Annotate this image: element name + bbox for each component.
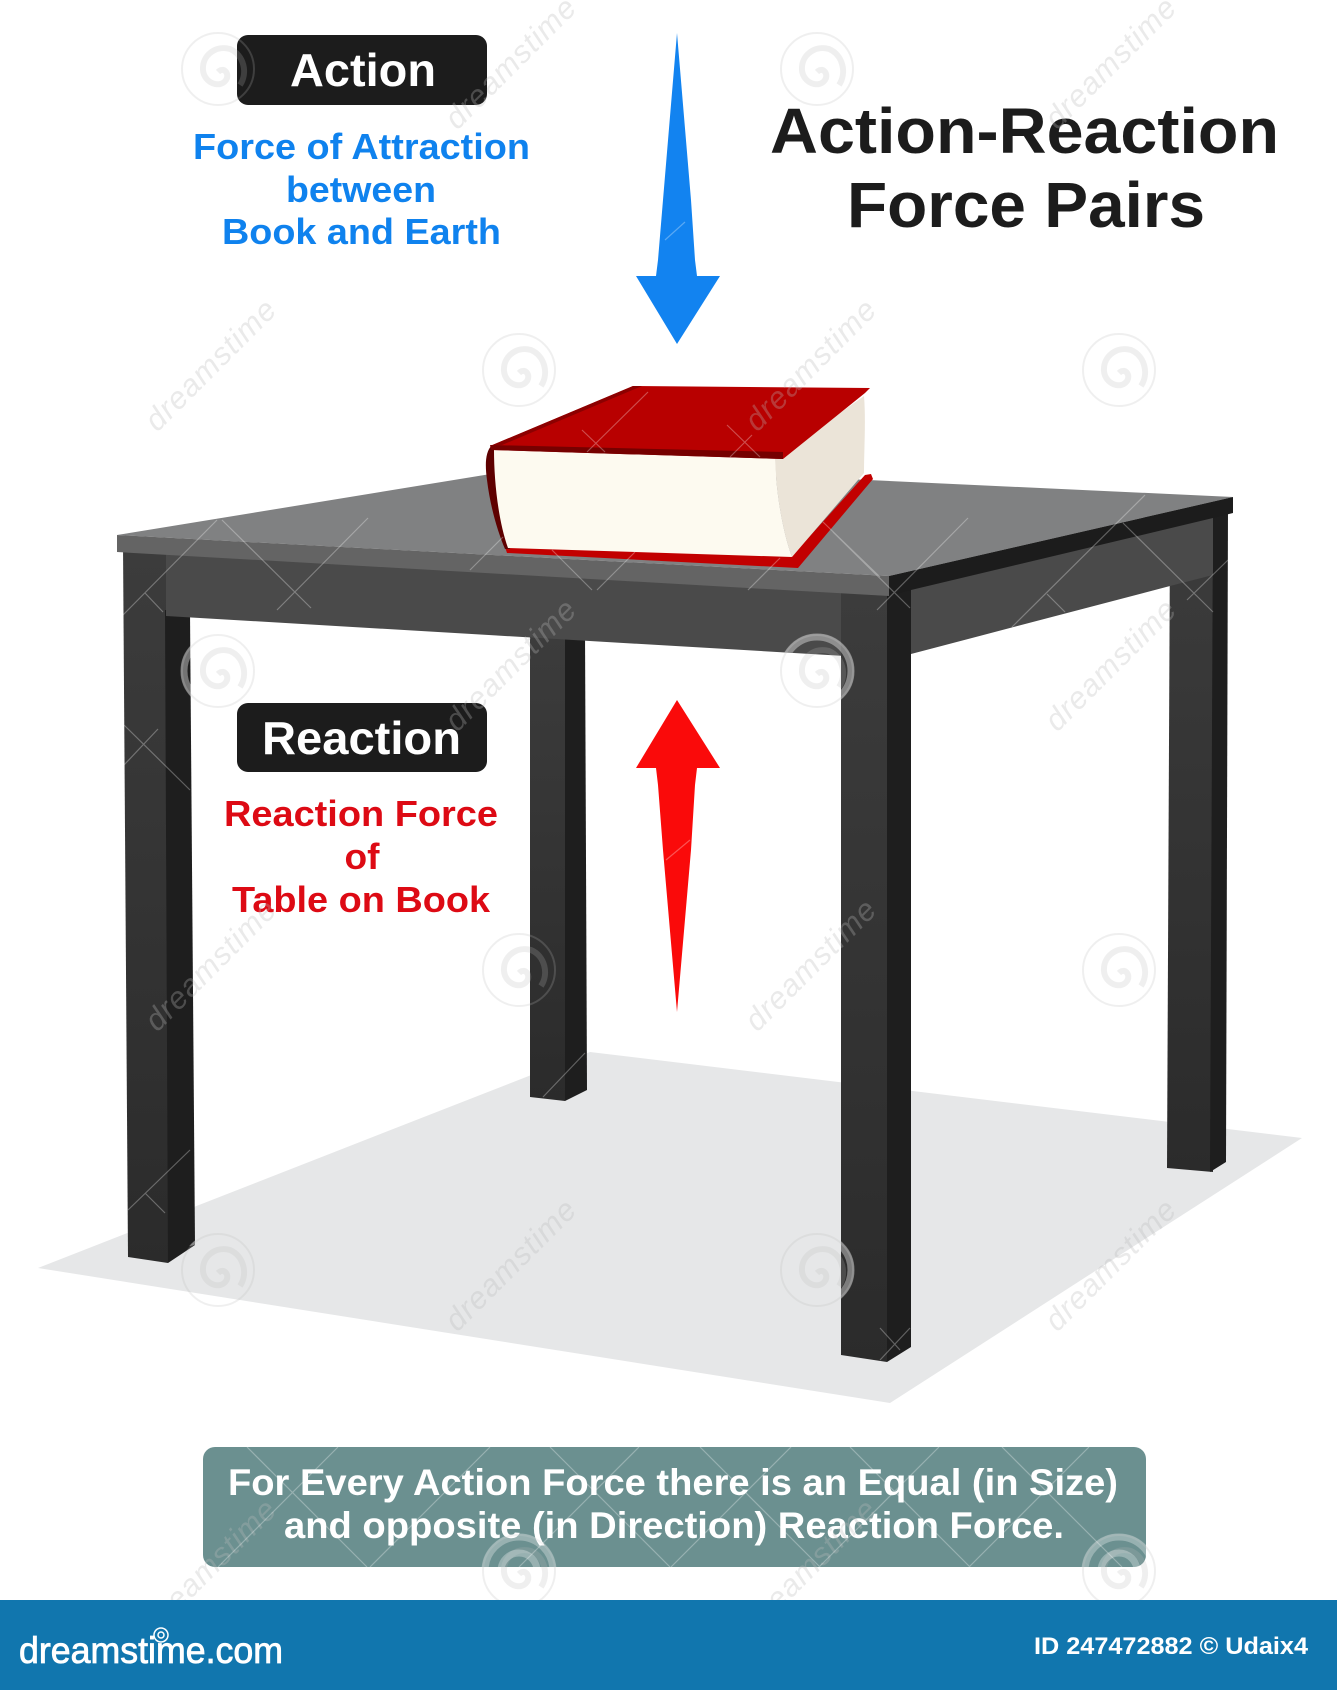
statement box: and opposite (in Direction) Reaction Force. — [284, 1505, 1064, 1546]
table top right edge — [889, 497, 1233, 596]
book top cover — [490, 386, 870, 459]
front left leg — [123, 545, 195, 1263]
watermark: dreamstime — [737, 291, 884, 438]
action description — [193, 126, 530, 252]
footer image id: ID 247472882 © Udaix4 — [1034, 1633, 1309, 1660]
watermark: dreamstime — [437, 1191, 584, 1338]
action description: between — [286, 169, 436, 210]
table top front edge — [117, 535, 889, 596]
action label — [237, 35, 487, 105]
watermark: dreamstime — [137, 891, 284, 1038]
logo spiral mark — [154, 1628, 168, 1642]
table — [117, 465, 1233, 1362]
action label: Action — [290, 44, 436, 96]
watermark: dreamstime — [137, 1491, 284, 1638]
title — [770, 95, 1279, 241]
reaction label: Reaction — [262, 712, 461, 764]
watermark: dreamstime — [437, 591, 584, 738]
book bottom cover — [505, 474, 873, 568]
red reaction arrow — [636, 700, 720, 1012]
back right leg — [1167, 505, 1228, 1172]
reaction description: Table on Book — [232, 879, 491, 920]
table top surface — [117, 465, 1233, 576]
watermark: dreamstime — [137, 291, 284, 438]
watermark: dreamstime — [737, 891, 884, 1038]
title: Action-Reaction — [770, 95, 1279, 167]
reaction description: Reaction Force — [224, 793, 498, 834]
statement box — [203, 1447, 1146, 1567]
book — [486, 386, 873, 568]
book cover front lip — [490, 445, 783, 459]
action description: Book and Earth — [222, 211, 501, 252]
book pages side — [775, 396, 865, 557]
front apron — [166, 545, 845, 656]
book pages front — [494, 450, 792, 557]
action description: Force of Attraction — [193, 126, 530, 167]
statement box: For Every Action Force there is an Equal (in Size) — [228, 1462, 1118, 1503]
footer banner — [0, 1600, 1337, 1690]
book spine — [486, 445, 510, 549]
watermark: dreamstime — [1037, 591, 1184, 738]
right apron — [911, 513, 1213, 654]
front right leg — [841, 585, 911, 1362]
book cover shading — [490, 386, 642, 446]
back left leg — [530, 630, 587, 1101]
title: Force Pairs — [847, 169, 1205, 241]
footer logo: dreamstime.com — [19, 1630, 283, 1671]
watermark: dreamstime — [1037, 1191, 1184, 1338]
blue action arrow — [636, 33, 720, 344]
reaction description: of — [344, 836, 381, 877]
reaction description — [224, 793, 498, 920]
floor shadow — [38, 1052, 1302, 1403]
reaction label — [237, 703, 487, 772]
watermark: dreamstime — [737, 1491, 884, 1638]
